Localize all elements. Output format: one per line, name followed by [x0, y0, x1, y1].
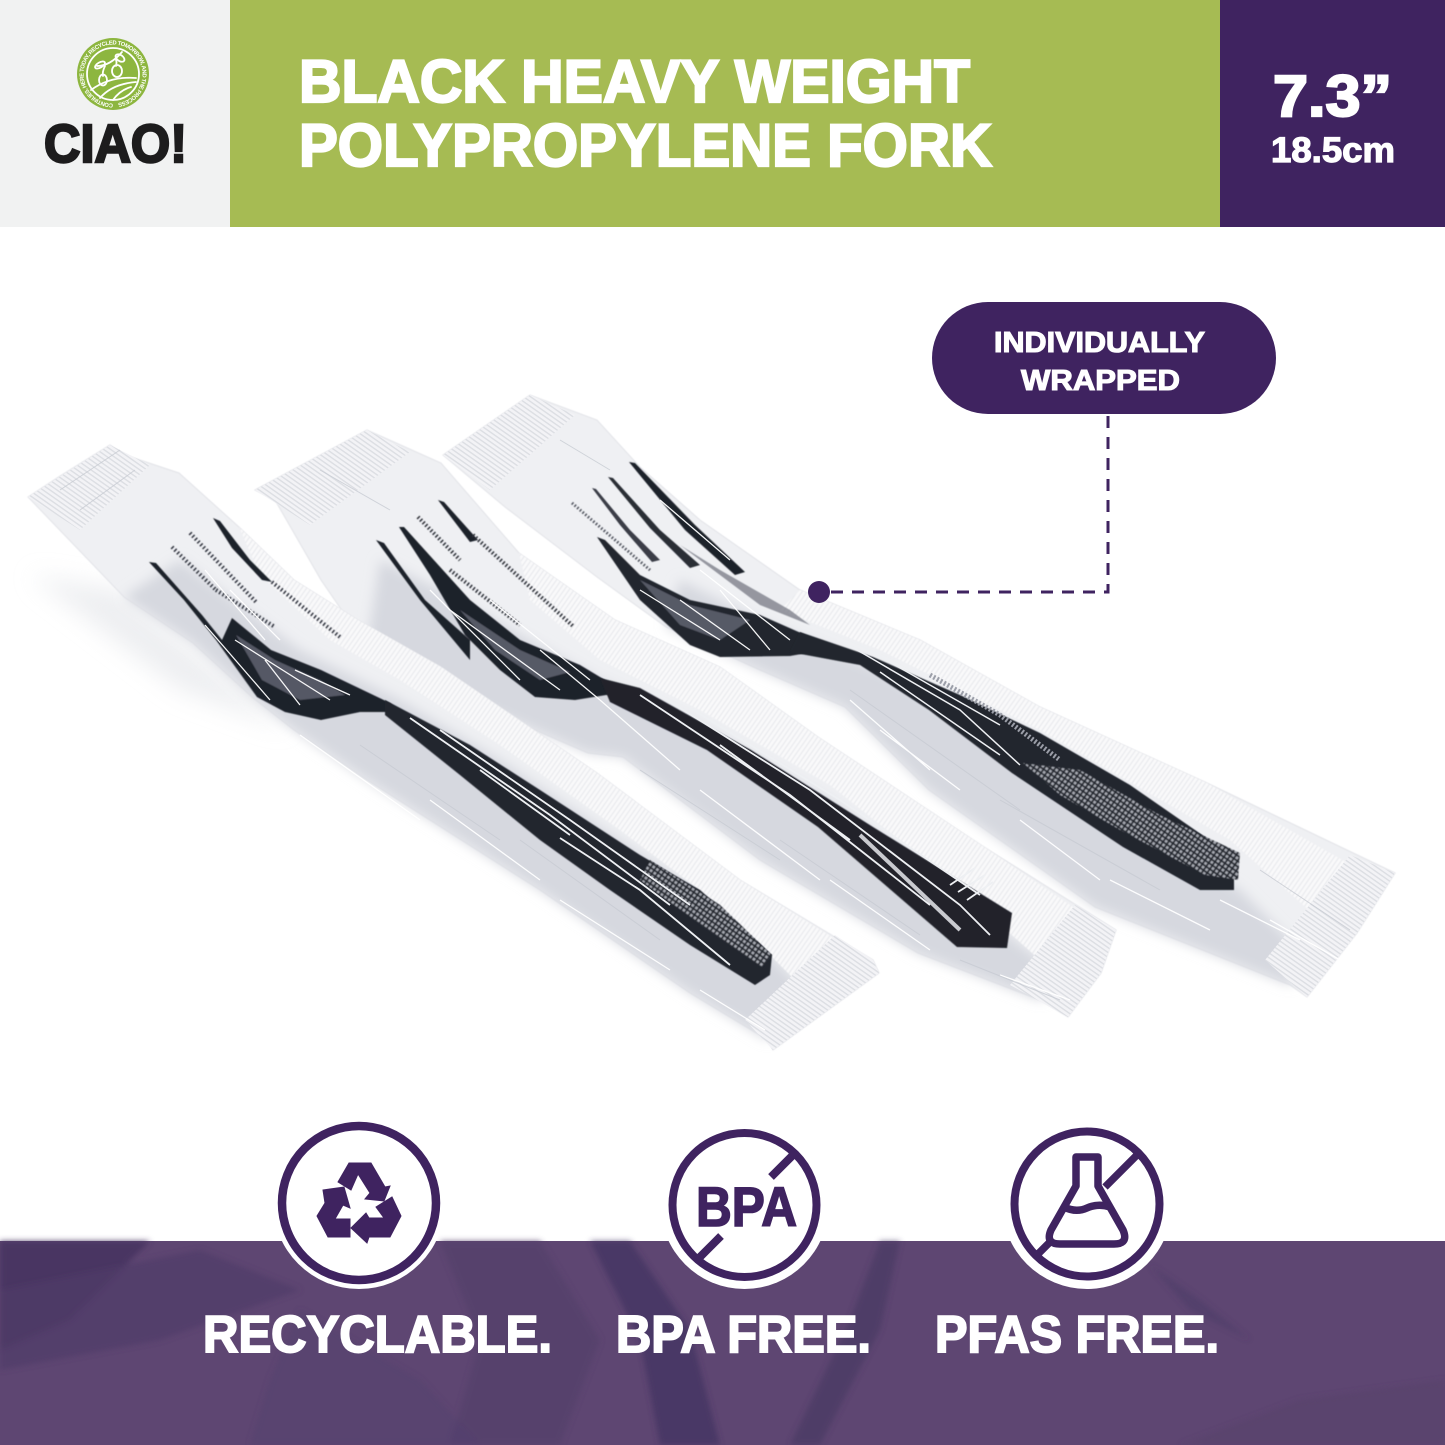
logo badge: CONTINUES. HERE TODAY, RECYCLED TOMORROW, AND THE PROCESS — [80, 40, 147, 108]
callout pill — [932, 302, 1276, 414]
size text: 18.5cm — [1271, 131, 1395, 170]
fork handle — [600, 678, 1012, 948]
background leaves — [0, 1241, 1445, 1445]
feature labels — [203, 1306, 1219, 1364]
wrapper — [255, 430, 1116, 1017]
label: BPA free: BPA FREE. — [616, 1306, 871, 1364]
wrinkles — [205, 570, 765, 1030]
icon: PFAS free flask — [1014, 1132, 1160, 1276]
callout text — [994, 327, 1205, 397]
icon: recycle — [282, 1126, 436, 1280]
fork handle — [385, 700, 772, 985]
title: BLACK HEAVY WEIGHT — [299, 48, 970, 115]
wrinkles — [640, 500, 1340, 960]
fork tines and head — [149, 518, 400, 720]
label: PFAS free: PFAS FREE. — [935, 1306, 1219, 1364]
header: size panel — [1220, 0, 1445, 227]
fork tines and head — [572, 462, 835, 657]
icon: BPA free: BPA — [696, 1175, 797, 1238]
wrapper — [28, 445, 879, 1050]
logo wordmark: CIAO! — [44, 114, 187, 174]
icon: BPA free — [672, 1133, 816, 1277]
callout text: INDIVIDUALLY — [994, 327, 1205, 359]
label: recyclable: RECYCLABLE. — [203, 1306, 552, 1364]
header: title panel — [230, 0, 1220, 227]
wrapped fork: back — [443, 395, 1395, 997]
icon halos — [273, 1117, 1172, 1289]
title — [299, 48, 992, 179]
callout text: WRAPPED — [1021, 365, 1180, 397]
title: POLYPROPYLENE FORK — [299, 112, 992, 179]
size text — [1271, 64, 1395, 170]
footer band — [0, 1117, 1445, 1445]
callout leader line — [808, 416, 1108, 603]
header: logo panel — [0, 0, 230, 227]
wrapped fork: middle — [255, 430, 1116, 1017]
fork tines and head — [376, 500, 625, 700]
size text: 7.3” — [1273, 64, 1392, 129]
fork handle — [790, 632, 1240, 890]
callout: individually wrapped — [808, 302, 1276, 603]
product photo: three wrapped forks — [28, 395, 1395, 1050]
wrapper — [443, 395, 1395, 997]
wrinkles — [430, 590, 1070, 1000]
wrapped fork: front — [28, 445, 879, 1050]
